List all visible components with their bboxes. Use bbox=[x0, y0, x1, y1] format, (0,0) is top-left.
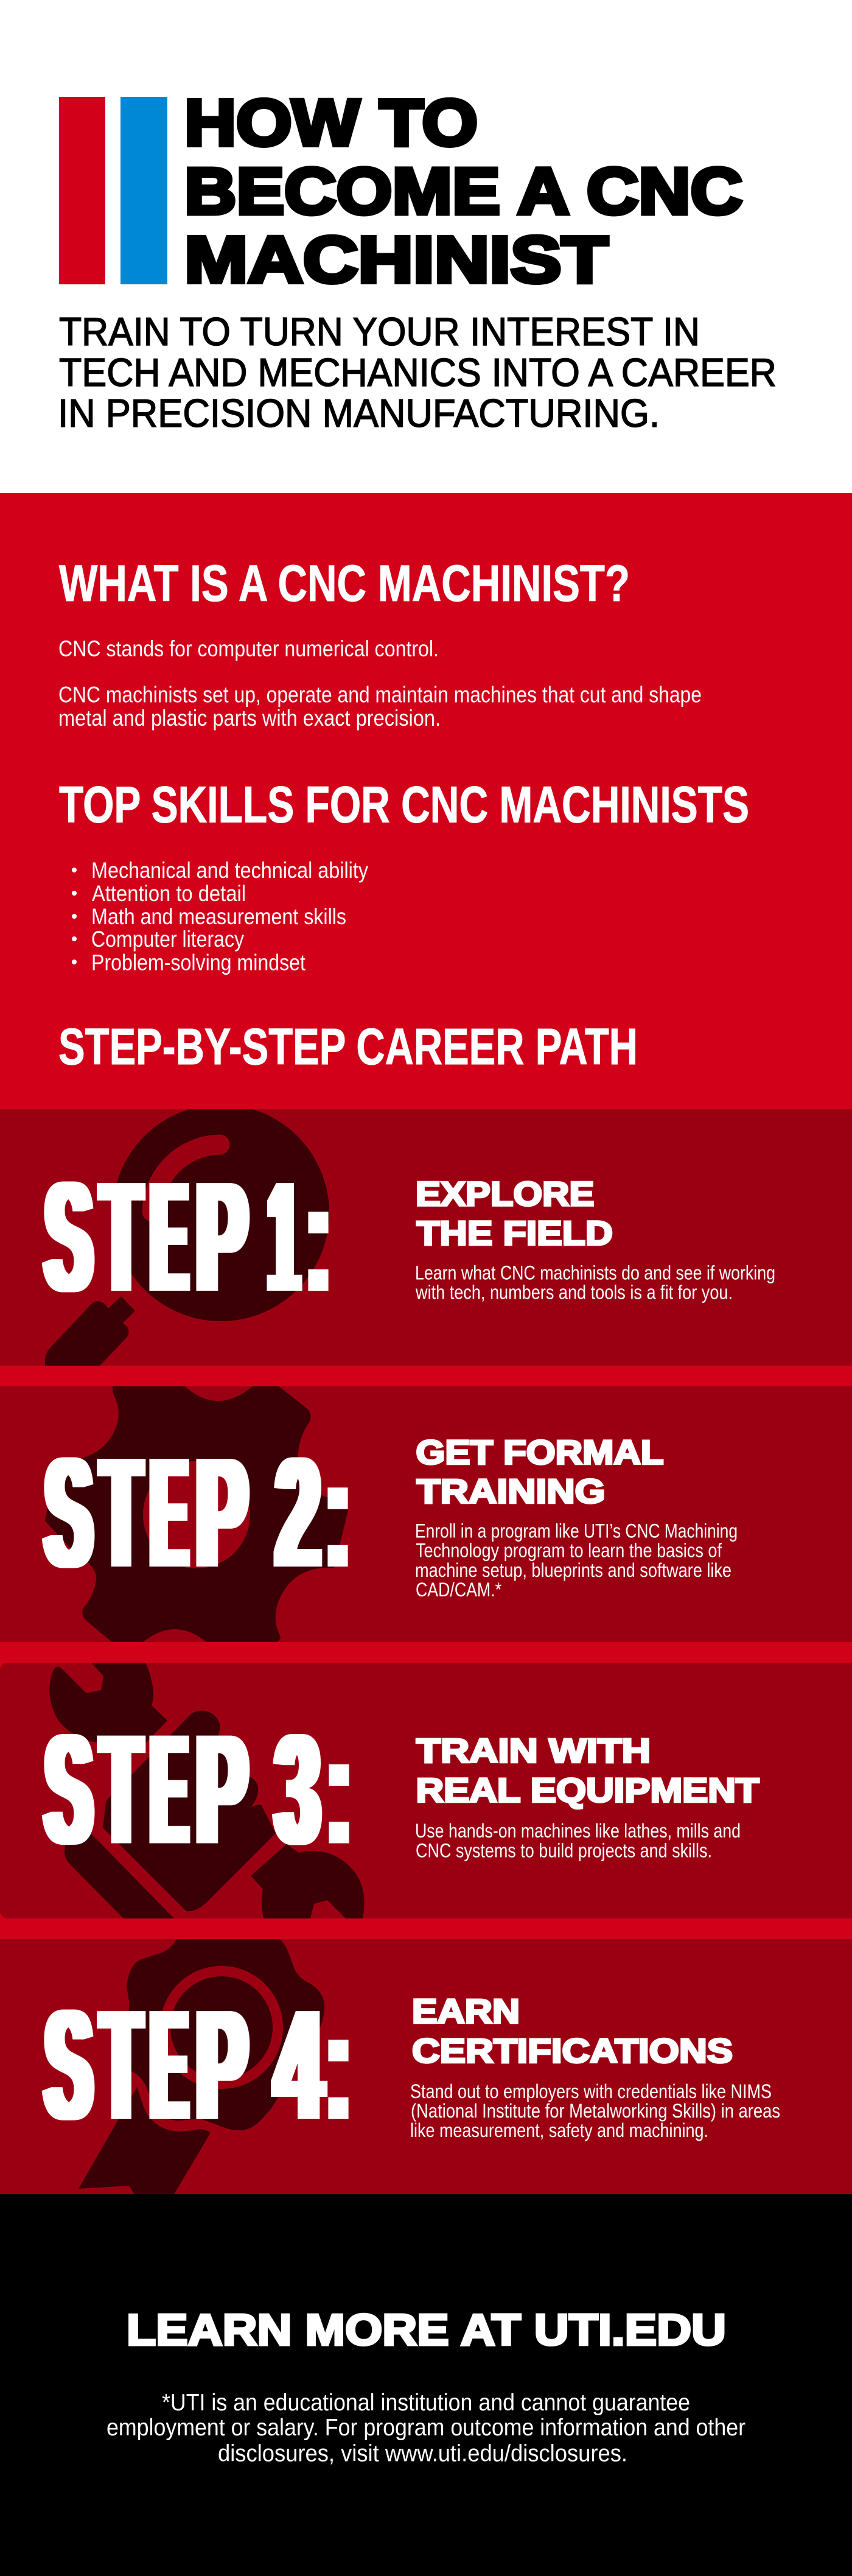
step heading: CERTIFICATIONS bbox=[412, 2031, 733, 2070]
icon: crossed wrenches bbox=[49, 1663, 365, 1918]
title: BECOME A CNC bbox=[184, 154, 742, 228]
list: skills: Computer literacy bbox=[91, 927, 244, 952]
list: skills bbox=[72, 858, 368, 975]
step number: S bbox=[45, 1425, 92, 1600]
list: skills: Problem-solving mindset bbox=[91, 950, 306, 975]
step number: E bbox=[152, 1978, 187, 2152]
step heading: EXPLORE bbox=[416, 1174, 594, 1213]
title bbox=[184, 85, 742, 296]
icon: magnifying glass bbox=[45, 1104, 329, 1366]
subtitle bbox=[58, 309, 777, 435]
panel: step 4: : bbox=[327, 1978, 349, 2152]
heading: career path: STEP-BY-STEP CAREER PATH bbox=[58, 1018, 638, 1075]
disclaimer: disclosures, visit www.uti.edu/disclosures. bbox=[218, 2440, 627, 2467]
step heading bbox=[416, 1732, 759, 1809]
step text bbox=[415, 1262, 775, 1303]
step number: S bbox=[45, 1149, 92, 1324]
panel: step 2: : bbox=[327, 1425, 349, 1600]
step heading: THE FIELD bbox=[416, 1214, 613, 1252]
list: skills: Math and measurement skills bbox=[91, 904, 346, 929]
step number: T bbox=[102, 1702, 141, 1876]
text: CNC definition bbox=[58, 636, 702, 731]
step number: E bbox=[152, 1425, 187, 1600]
step heading bbox=[412, 1992, 733, 2070]
step number: P bbox=[197, 1978, 245, 2152]
panel: step 2 bbox=[0, 1386, 852, 1642]
text: CNC definition: metal and plastic parts with exact precision. bbox=[58, 706, 441, 731]
step number: 4 bbox=[275, 1978, 323, 2152]
heading: what is a CNC machinist: WHAT IS A CNC MACHINIST? bbox=[59, 555, 630, 612]
panel: step 4 bbox=[0, 1939, 852, 2194]
text: CNC definition: CNC stands for computer numerical control. bbox=[58, 636, 439, 661]
panel: step 3 bbox=[0, 1663, 852, 1918]
icon: gear with wrench bbox=[79, 1939, 324, 2194]
panel: step 1 bbox=[0, 1104, 852, 1366]
icon: gear bbox=[45, 1386, 348, 1642]
panel: footer bbox=[0, 2194, 852, 2576]
disclaimer: employment or salary. For program outcome information and other bbox=[106, 2415, 746, 2441]
panel: step 3: : bbox=[328, 1702, 350, 1876]
step heading: TRAIN WITH bbox=[416, 1732, 651, 1769]
step text: CNC systems to build projects and skills. bbox=[416, 1840, 712, 1862]
disclaimer: *UTI is an educational institution and cannot guarantee bbox=[162, 2390, 690, 2416]
step number: T bbox=[102, 1425, 141, 1600]
step heading: TRAINING bbox=[416, 1472, 605, 1510]
step number: S bbox=[45, 1978, 92, 2152]
step text bbox=[415, 1520, 738, 1601]
list: skills: Mechanical and technical ability bbox=[91, 858, 368, 883]
step text bbox=[410, 2080, 780, 2141]
step number: E bbox=[152, 1702, 187, 1876]
step number: 2 bbox=[276, 1425, 320, 1600]
panel: step 1: : bbox=[307, 1149, 329, 1324]
list: skills: Attention to detail bbox=[92, 881, 246, 906]
step text: CAD/CAM.* bbox=[416, 1579, 501, 1601]
step number: 3 bbox=[276, 1702, 320, 1876]
step text: Enroll in a program like UTI’s CNC Machining bbox=[415, 1520, 738, 1542]
step text: machine setup, blueprints and software like bbox=[415, 1559, 732, 1581]
step number: P bbox=[197, 1149, 245, 1324]
step heading: REAL EQUIPMENT bbox=[416, 1771, 759, 1809]
call to action: LEARN MORE AT UTI.EDU bbox=[127, 2306, 726, 2355]
panel: header bbox=[0, 0, 852, 493]
subtitle: TECH AND MECHANICS INTO A CAREER bbox=[59, 350, 777, 395]
text: CNC definition: CNC machinists set up, operate and maintain machines that cut and shape bbox=[58, 682, 702, 707]
step number: T bbox=[102, 1978, 141, 2152]
step text bbox=[415, 1820, 741, 1862]
disclaimer bbox=[106, 2390, 746, 2467]
title: MACHINIST bbox=[184, 223, 608, 296]
step heading: EARN bbox=[412, 1992, 520, 2030]
step number: E bbox=[152, 1149, 187, 1324]
step number: S bbox=[45, 1702, 92, 1876]
step text: like measurement, safety and machining. bbox=[410, 2119, 708, 2141]
step text: Use hands-on machines like lathes, mills and bbox=[415, 1820, 741, 1842]
subtitle: TRAIN TO TURN YOUR INTEREST IN bbox=[59, 309, 700, 354]
step text: with tech, numbers and tools is a fit for you. bbox=[415, 1281, 733, 1303]
step text: Learn what CNC machinists do and see if working bbox=[415, 1262, 775, 1283]
step text: (National Institute for Metalworking Skills) in areas bbox=[411, 2100, 780, 2122]
step number: P bbox=[197, 1702, 245, 1876]
step text: Technology program to learn the basics of bbox=[416, 1539, 722, 1561]
panel: intro red section bbox=[0, 493, 852, 2194]
step heading bbox=[416, 1433, 663, 1510]
step number: P bbox=[197, 1425, 245, 1600]
title: HOW TO bbox=[184, 85, 478, 160]
step number: T bbox=[102, 1149, 141, 1324]
step heading: GET FORMAL bbox=[416, 1433, 663, 1471]
step heading bbox=[416, 1174, 613, 1252]
step number: 1 bbox=[269, 1149, 298, 1324]
icon: red and blue bars bbox=[59, 97, 167, 284]
step text: Stand out to employers with credentials like NIMS bbox=[410, 2080, 772, 2102]
subtitle: IN PRECISION MANUFACTURING. bbox=[58, 391, 660, 435]
